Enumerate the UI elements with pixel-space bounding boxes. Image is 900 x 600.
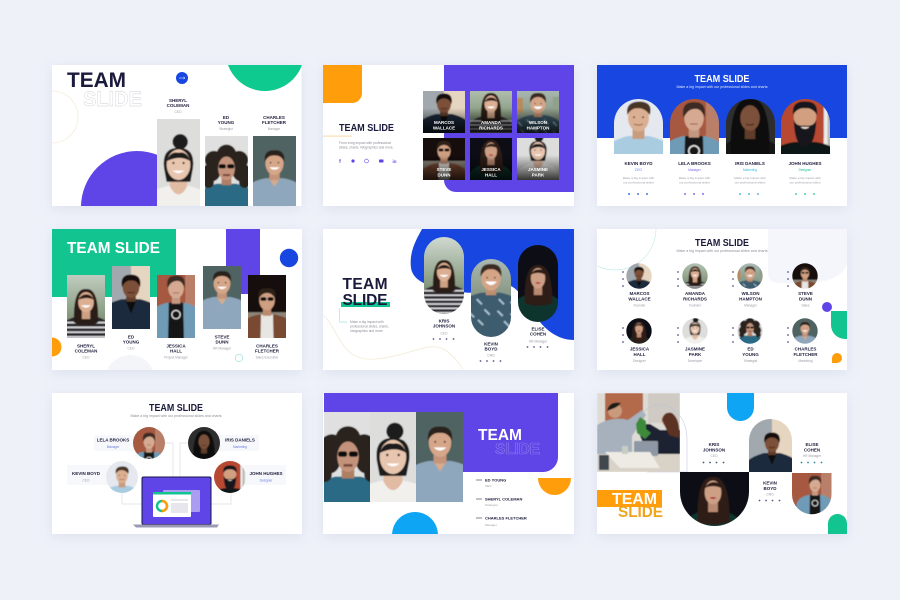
connector lines	[122, 443, 231, 504]
photo: John Hughes	[781, 99, 830, 154]
photo: Wilson Hampton	[737, 263, 763, 289]
blue tab	[727, 393, 754, 421]
description text: From a big impact with professional	[339, 141, 391, 145]
label: Steve Dunn: STEVE	[798, 291, 813, 296]
member label: Kevin Boyd: BOYD	[763, 486, 777, 491]
label card: John Hughes: Designer	[260, 478, 273, 482]
member details: Lela Brooks: our professional slides	[679, 180, 710, 184]
label card: John Hughes	[240, 465, 286, 485]
title SLIDE: SLIDE	[618, 504, 663, 521]
member label: Charles Fletcher: CHARLES	[256, 344, 278, 348]
label: Amanda Richards: RICHARDS	[683, 296, 707, 302]
member details: Kevin Boyd: Make a big impact with	[623, 176, 655, 180]
label: Wilson Hampton: Manager	[744, 304, 758, 308]
photo: Steve Dunn	[792, 263, 818, 289]
photo: Jessica Hall: JESSICA	[481, 167, 501, 172]
subtitle: Make a big impact with our professional slides and charts	[676, 85, 768, 89]
member label: Jessica Hall	[164, 344, 189, 360]
team member: Charles Fletcher: CHARLES	[263, 115, 285, 120]
member label: Charles Fletcher: Sales Executive	[256, 356, 279, 360]
member label: Elise Cohen: ELISE	[805, 442, 819, 447]
photo: Lela Brooks	[670, 99, 719, 154]
photo: Marcos Wallace: MARCOS	[434, 120, 454, 125]
member label: Steve Dunn: HR Manager	[213, 346, 232, 350]
member label: Kevin Boyd: BOYD	[484, 346, 498, 352]
blue header band	[597, 65, 847, 138]
title TEAM: TEAM	[612, 491, 657, 508]
list item: Charles Fletcher: CHARLES FLETCHER	[485, 516, 527, 520]
title: TEAM SLIDE	[339, 122, 394, 134]
photo: Ed Young	[717, 402, 827, 502]
member label: Ed Young: YOUNG	[123, 340, 140, 344]
member label: Jessica Hall: JESSICA	[166, 344, 186, 348]
title SLIDE outlined: SLIDE	[495, 441, 540, 458]
member label: Elise Cohen: HR Manager	[803, 454, 822, 458]
orange underline	[323, 135, 352, 137]
green rounded block	[831, 311, 847, 339]
title SLIDE outlined: SLIDE	[83, 88, 142, 111]
photo: Marcos Wallace	[423, 91, 465, 133]
member label: Kevin Boyd: KEVIN	[484, 342, 498, 346]
photo: Jessica	[636, 435, 790, 575]
member label: Elise Cohen	[527, 326, 548, 348]
member details: John Hughes: JOHN HUGHES	[788, 161, 822, 166]
panel: slide 9 mosaic	[597, 393, 861, 575]
member label: Kris Johnson	[703, 442, 725, 463]
photo: Kris Johnson	[424, 237, 464, 314]
photo: Steve Dunn: STEVE	[437, 167, 451, 172]
label: Steve Dunn	[798, 291, 813, 308]
orange corner block	[323, 65, 362, 103]
list item: Ed Young: ED YOUNG	[485, 478, 506, 482]
member label: Sheryl Coleman: CEO	[83, 356, 90, 360]
photo: Kevin Boyd	[471, 259, 511, 337]
member label: Sheryl Coleman: COLEMAN	[75, 348, 97, 354]
label: Steve Dunn: Sales	[802, 304, 810, 308]
panel: slide 3 arched portraits	[596, 65, 848, 210]
subtitle: Make a big impact with our professional slides and charts	[676, 249, 768, 253]
list item: Sheryl Coleman	[476, 496, 522, 507]
photo: Jessica Hall	[470, 138, 512, 180]
photo: Jasmine Park	[660, 302, 730, 366]
member label: Elise Cohen: COHEN	[530, 332, 546, 336]
blue half circle	[392, 512, 438, 558]
photo: Ed Young	[715, 302, 785, 366]
label card: Iris Daniels	[213, 435, 259, 451]
photo: Steve Dunn	[203, 266, 241, 329]
label: Marcos Wallace: WALLACE	[628, 296, 651, 302]
panel: slide 5 pill portraits	[322, 229, 574, 374]
purple header panel	[324, 393, 558, 472]
panel: slide 2 photo grid	[323, 63, 593, 210]
social icons	[339, 159, 397, 165]
member label: Sheryl Coleman	[75, 344, 97, 360]
teal outline arc	[597, 229, 656, 270]
photo: Jessica Hall	[626, 318, 652, 344]
member label: Ed Young: ED	[128, 334, 135, 340]
social icons: f	[339, 159, 341, 165]
photo: Kevin Boyd	[614, 99, 663, 154]
social dots	[622, 271, 789, 343]
orange half circle	[538, 478, 571, 495]
member details: Lela Brooks: LELA BROOKS	[678, 161, 711, 166]
photo: Amanda Richards	[470, 91, 512, 133]
purple block	[226, 229, 260, 294]
photo: Sheryl Coleman	[288, 379, 498, 569]
member label: Kevin Boyd: CMO	[766, 492, 774, 496]
member details: Kevin Boyd: KEVIN BOYD	[624, 161, 653, 166]
label: Ed Young: ED	[747, 346, 754, 352]
label card: Lela Brooks: Manager	[107, 445, 120, 449]
teal connector line	[340, 308, 347, 322]
label: Jasmine Park	[685, 346, 705, 363]
label: Amanda Richards: Founder	[689, 304, 702, 308]
member details: John Hughes	[788, 161, 822, 195]
photo: Ed Young	[112, 266, 150, 329]
label card: Lela Brooks: LELA BROOKS	[97, 438, 129, 442]
team member: Sheryl Coleman: CEO	[175, 110, 182, 114]
label: Amanda Richards	[683, 291, 707, 308]
member label: Elise Cohen	[801, 442, 822, 463]
photo: Wilson Hampton	[517, 91, 559, 133]
orange drop shape	[832, 353, 842, 363]
member details: Lela Brooks: Make a big impact with	[679, 176, 711, 180]
team member: Charles Fletcher	[262, 115, 287, 131]
photo: Jasmine Park: PARK	[532, 172, 545, 178]
member label: Kris Johnson: KRIS	[439, 318, 449, 324]
team member: Sheryl Coleman: COLEMAN	[167, 103, 189, 108]
green highlight	[341, 302, 390, 307]
member label: Kris Johnson: JOHNSON	[433, 324, 455, 328]
icon: laptop with chart window	[133, 477, 219, 528]
label: Marcos Wallace: Founder	[634, 304, 646, 308]
photo: Steve Dunn	[423, 138, 465, 180]
light grey half circle	[108, 355, 152, 370]
member label: Kevin Boyd	[480, 342, 501, 362]
member label: Kris Johnson: CEO	[711, 454, 718, 458]
panel: slide 7 laptop org diagram	[52, 393, 302, 534]
label: Charles Fletcher	[794, 346, 818, 363]
photo: Jasmine Park	[517, 138, 559, 180]
orange title band	[597, 490, 662, 507]
label: Jasmine Park: Developer	[688, 359, 703, 363]
title: TEAM SLIDE	[695, 238, 749, 249]
photo: Marcos Wallace: WALLACE	[433, 126, 455, 130]
label card: Lela Brooks	[94, 435, 140, 451]
photo: Ed Young	[249, 383, 447, 563]
description text: slides, charts, infographics and more.	[339, 146, 394, 150]
photo: Wilson Hampton: WILSON	[529, 120, 547, 125]
team member: Ed Young: ED	[223, 115, 230, 120]
photo: Iris Daniels	[158, 407, 250, 491]
label card: John Hughes: JOHN HUGHES	[249, 471, 283, 476]
list item: Sheryl Coleman: Strategist	[485, 503, 498, 507]
label: Wilson Hampton: HAMPTON	[739, 296, 762, 302]
label: Jessica Hall	[630, 346, 650, 363]
purple half circle decoration	[81, 151, 157, 206]
description text: infographics and more.	[350, 329, 384, 333]
label card: Kevin Boyd: KEVIN BOYD	[72, 471, 101, 476]
member label: Steve Dunn	[213, 334, 232, 350]
list item: Charles Fletcher: Manager	[485, 523, 497, 527]
panel: slide 1 tall portraits	[52, 65, 302, 210]
photo: Wilson Hampton: HAMPTON	[527, 126, 549, 130]
team member: Charles Fletcher: FLETCHER	[262, 120, 287, 125]
photo: Sheryl	[157, 119, 200, 206]
member label: Elise Cohen: COHEN	[804, 448, 820, 452]
member label: Jessica Hall: HALL	[170, 348, 182, 354]
description text: professional slides, charts,	[350, 324, 389, 328]
team member: Charles Fletcher: Manager	[268, 127, 281, 131]
member details: Iris Daniels: IRIS DANIELS	[735, 161, 765, 166]
label: Marcos Wallace: MARCOS	[630, 291, 650, 296]
label: Jessica Hall: Designer	[633, 359, 647, 363]
member details: Iris Daniels: Make a big impact with	[734, 176, 766, 180]
member label: Charles Fletcher	[255, 344, 280, 360]
orange half circle	[52, 338, 62, 356]
photo: Kevin Boyd	[76, 441, 168, 525]
member label: Jessica Hall: Project Manager	[164, 356, 189, 360]
label: Steve Dunn: DUNN	[799, 296, 812, 302]
member label: Kris Johnson: JOHNSON	[703, 448, 725, 452]
member label: Kris Johnson: CEO	[441, 332, 448, 336]
label: Jessica Hall: JESSICA	[630, 346, 650, 352]
member label: Sheryl Coleman: SHERYL	[77, 344, 95, 348]
photo: Charles Fletcher	[248, 275, 286, 338]
member label: Steve Dunn: STEVE	[215, 334, 229, 340]
label: Marcos Wallace	[628, 291, 651, 308]
infographic canvas	[52, 65, 848, 538]
green tab	[828, 514, 847, 534]
social icons: in	[392, 159, 397, 164]
label card: Iris Daniels: Marketing	[233, 445, 247, 449]
title: TEAM	[342, 276, 388, 293]
member details: Iris Daniels: our professional slides	[735, 180, 766, 184]
title: TEAM SLIDE	[694, 74, 750, 85]
green circle decoration	[228, 65, 302, 91]
member details: John Hughes: our professional slides	[790, 180, 821, 184]
photo: Lela Brooks	[103, 407, 195, 491]
member label: Charles Fletcher: FLETCHER	[255, 348, 280, 354]
photo: Marcos Wallace	[626, 263, 652, 289]
panel: slide 6 eight circle portraits	[596, 229, 848, 374]
member label: Ed Young: CEO	[128, 346, 135, 350]
photo: Charles Fletcher	[352, 377, 528, 537]
member label: Kris Johnson: KRIS	[709, 442, 719, 447]
label: Ed Young	[742, 346, 759, 363]
team member: Ed Young: YOUNG	[218, 120, 235, 125]
member details: Kevin Boyd	[623, 161, 655, 195]
label: Charles Fletcher: FLETCHER	[794, 352, 818, 357]
photo: Jessica Hall	[157, 275, 195, 338]
photo: office high five	[597, 393, 680, 472]
label: Ed Young: YOUNG	[742, 352, 759, 357]
title TEAM: TEAM	[478, 427, 522, 444]
purple circle	[822, 302, 832, 312]
label: Charles Fletcher: Marketing	[798, 359, 813, 363]
photo: John Hughes	[184, 441, 276, 525]
photo: Amanda Richards: RICHARDS	[479, 126, 503, 130]
label: Wilson Hampton	[739, 291, 762, 308]
photo: Iris Daniels	[726, 99, 775, 154]
member label: Elise Cohen: HR Manager	[529, 340, 548, 344]
light grey corner shape	[768, 229, 847, 283]
team member: Ed Young	[218, 115, 235, 131]
panel: slide 8 three portraits and list	[249, 377, 574, 569]
photo: Lela Brooks	[769, 450, 861, 534]
member details: Iris Daniels: Marketing	[743, 168, 757, 172]
label: Wilson Hampton: WILSON	[742, 291, 760, 296]
photo: Charles	[253, 136, 296, 206]
member label: Steve Dunn: DUNN	[216, 340, 228, 344]
panel: slide 4 staggered portraits	[52, 229, 302, 374]
member details: Iris Daniels	[734, 161, 766, 195]
teal ring	[235, 354, 243, 362]
label card: Iris Daniels: IRIS DANIELS	[225, 438, 255, 442]
member details: John Hughes: Designer	[799, 168, 812, 172]
green header block	[52, 229, 176, 297]
photo: Sheryl Coleman	[67, 275, 105, 338]
purple panel	[444, 65, 574, 192]
label: Amanda Richards: AMANDA	[685, 291, 706, 296]
photo: Amanda Richards	[682, 263, 708, 289]
list item: Ed Young: CEO	[485, 484, 492, 488]
label: Ed Young: Strategist	[744, 359, 757, 363]
member label: Kevin Boyd: CMO	[487, 354, 495, 358]
photo: Jasmine Park: JASMINE	[528, 167, 548, 172]
member label: Kevin Boyd	[759, 480, 780, 501]
team member: Sheryl Coleman	[167, 98, 189, 114]
cream outline circle	[52, 90, 78, 144]
photo: Elise Cohen	[518, 245, 558, 322]
photo: Steve Dunn: DUNN	[438, 172, 450, 178]
list item: Charles Fletcher	[476, 516, 527, 527]
title: TEAM SLIDE	[67, 240, 160, 257]
title second line: SLIDE	[342, 292, 388, 309]
photo: Ed	[205, 136, 248, 206]
title: TEAM SLIDE	[149, 403, 203, 414]
subtitle: Make a big impact with our professional slides and charts	[130, 414, 222, 418]
description text: Make a big impact with	[350, 320, 384, 324]
photo: Charles Fletcher	[770, 302, 840, 366]
team member: Ed Young: Strategist	[219, 127, 233, 131]
label: Jasmine Park: PARK	[689, 352, 702, 357]
label card: Kevin Boyd: CEO	[83, 478, 90, 482]
cream curve	[323, 315, 463, 370]
icon: blue arrow badge	[176, 72, 188, 84]
member details: Lela Brooks	[678, 161, 711, 195]
label card: Kevin Boyd	[67, 465, 113, 485]
blue blob	[411, 229, 574, 340]
member details: Lela Brooks: Manager	[688, 168, 702, 172]
member details: Kevin Boyd: CEO	[635, 168, 642, 172]
arch outline over photo	[640, 405, 687, 472]
member label: Kris Johnson	[433, 318, 455, 340]
photo: Jessica Hall: HALL	[485, 172, 497, 178]
member details: John Hughes: Make a big impact with	[789, 176, 821, 180]
photo: Amanda Richards: AMANDA	[481, 120, 502, 125]
member label: Kevin Boyd: KEVIN	[763, 480, 777, 486]
member label: Ed Young	[123, 334, 140, 350]
list item: Sheryl Coleman: SHERYL COLEMAN	[485, 496, 522, 502]
list item: Ed Young	[476, 478, 506, 488]
member label: Elise Cohen: ELISE	[531, 326, 545, 332]
team member: Sheryl Coleman: SHERYL	[169, 98, 187, 103]
label: Charles Fletcher: CHARLES	[795, 346, 816, 352]
label: Jasmine Park: JASMINE	[685, 346, 705, 352]
title TEAM: TEAM	[67, 69, 126, 92]
member details: Kevin Boyd: our professional slides	[623, 180, 654, 184]
label: Jessica Hall: HALL	[634, 352, 646, 357]
blue circle	[280, 249, 298, 267]
